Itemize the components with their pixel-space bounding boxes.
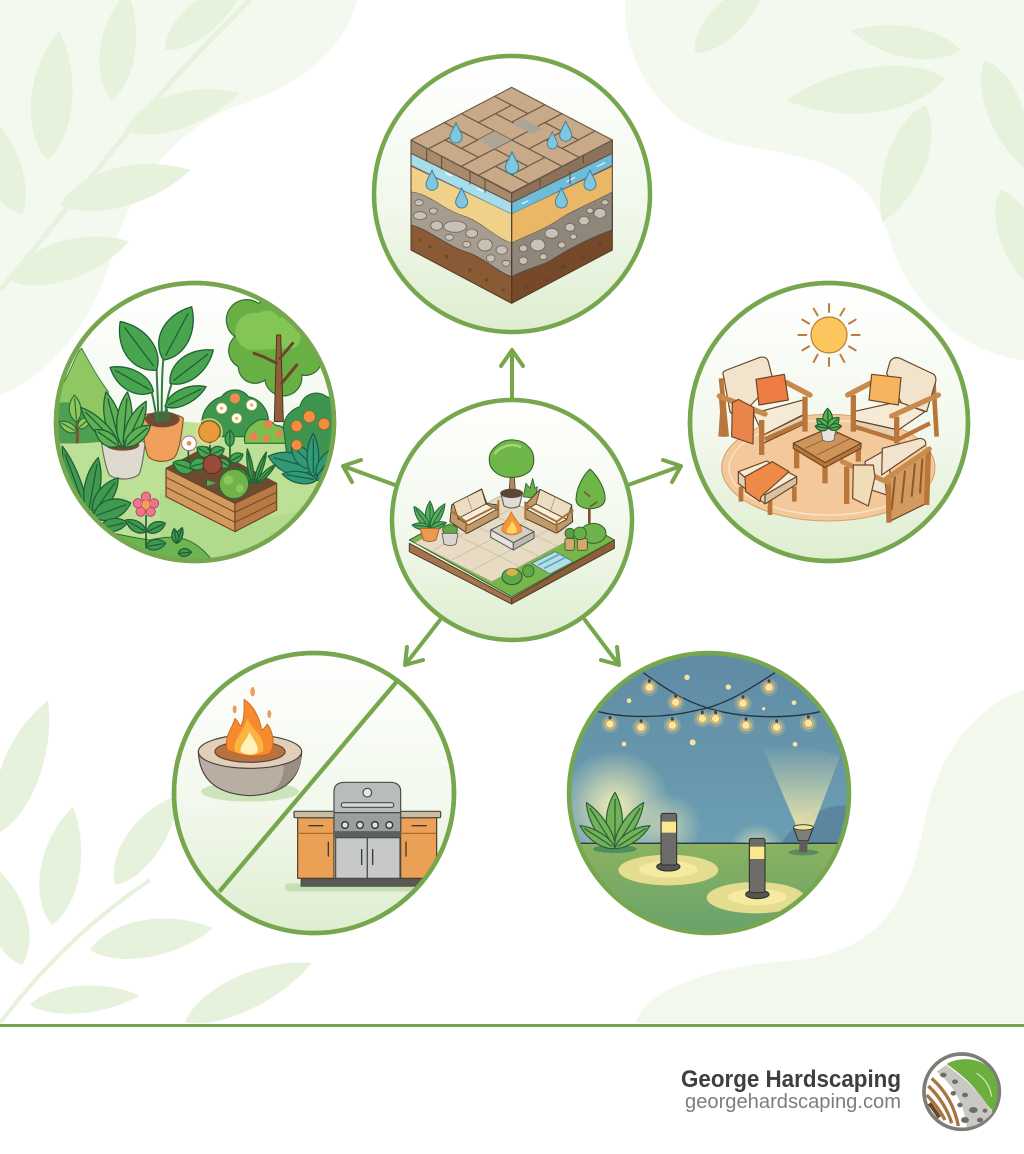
fire pit xyxy=(198,699,302,802)
panel: outdoor lighting xyxy=(558,650,855,940)
string lights wires xyxy=(598,673,820,717)
panel: outdoor seating xyxy=(690,283,968,561)
sofa right xyxy=(525,489,573,533)
back shrub xyxy=(523,478,537,498)
sun icon xyxy=(798,304,860,366)
circle frame xyxy=(392,400,632,640)
sparks xyxy=(233,687,271,718)
tree xyxy=(226,300,322,396)
sofa left xyxy=(450,489,498,533)
isometric ground layers xyxy=(411,87,612,303)
panel: garden and planting xyxy=(55,283,343,567)
diagonal divider xyxy=(219,682,397,892)
icon: company logo xyxy=(924,1054,999,1129)
night scene xyxy=(571,655,847,931)
panel: central backyard hub xyxy=(392,400,632,640)
bollard light 2 xyxy=(746,838,769,899)
ottoman xyxy=(738,461,797,515)
arrow up xyxy=(501,350,523,400)
circle frame xyxy=(569,653,849,933)
string light bulbs xyxy=(601,679,817,736)
rug xyxy=(722,414,938,521)
grill and kitchen xyxy=(285,782,441,891)
garden scene xyxy=(55,299,343,567)
tree xyxy=(508,472,516,500)
arrow lower left xyxy=(405,620,440,665)
chair left xyxy=(719,357,810,455)
plant xyxy=(577,792,653,853)
planters and bushes xyxy=(581,523,606,543)
chair right xyxy=(848,358,938,443)
potted plants xyxy=(411,501,448,531)
flowering shrub right xyxy=(282,392,332,481)
arrow right xyxy=(628,460,681,485)
fireflies xyxy=(622,675,797,747)
chair front xyxy=(842,438,930,523)
circle frame xyxy=(174,653,454,933)
lower foliage xyxy=(115,533,211,559)
lawn xyxy=(60,422,318,558)
flower bush xyxy=(202,390,268,437)
footer rule and white band xyxy=(0,1024,1024,1154)
arrows from hub to surrounding circles xyxy=(343,350,681,665)
spot light xyxy=(788,825,818,855)
website: georgehardscaping.com xyxy=(685,1091,901,1113)
arrow left xyxy=(343,460,395,485)
fire pit xyxy=(491,520,534,543)
raised bed xyxy=(166,447,277,503)
spotlight beam xyxy=(764,750,840,826)
panel: fire pit and outdoor kitchen xyxy=(174,653,454,933)
small shrub xyxy=(76,420,79,444)
water channel xyxy=(532,552,573,574)
ground light pools xyxy=(618,855,718,885)
large potted plant xyxy=(142,413,183,461)
circle frame xyxy=(690,283,968,561)
table with plant xyxy=(793,408,861,483)
tree right xyxy=(585,500,593,523)
back bush xyxy=(57,348,108,447)
panel: permeable paver cross-section xyxy=(374,56,650,332)
isometric yard xyxy=(409,440,614,604)
arrow lower right xyxy=(585,620,619,665)
brand name: George Hardscaping xyxy=(681,1066,901,1093)
bollard light 1 xyxy=(657,813,680,871)
small potted plant xyxy=(102,438,145,479)
circle frame xyxy=(56,283,334,561)
circle frame xyxy=(374,56,650,332)
